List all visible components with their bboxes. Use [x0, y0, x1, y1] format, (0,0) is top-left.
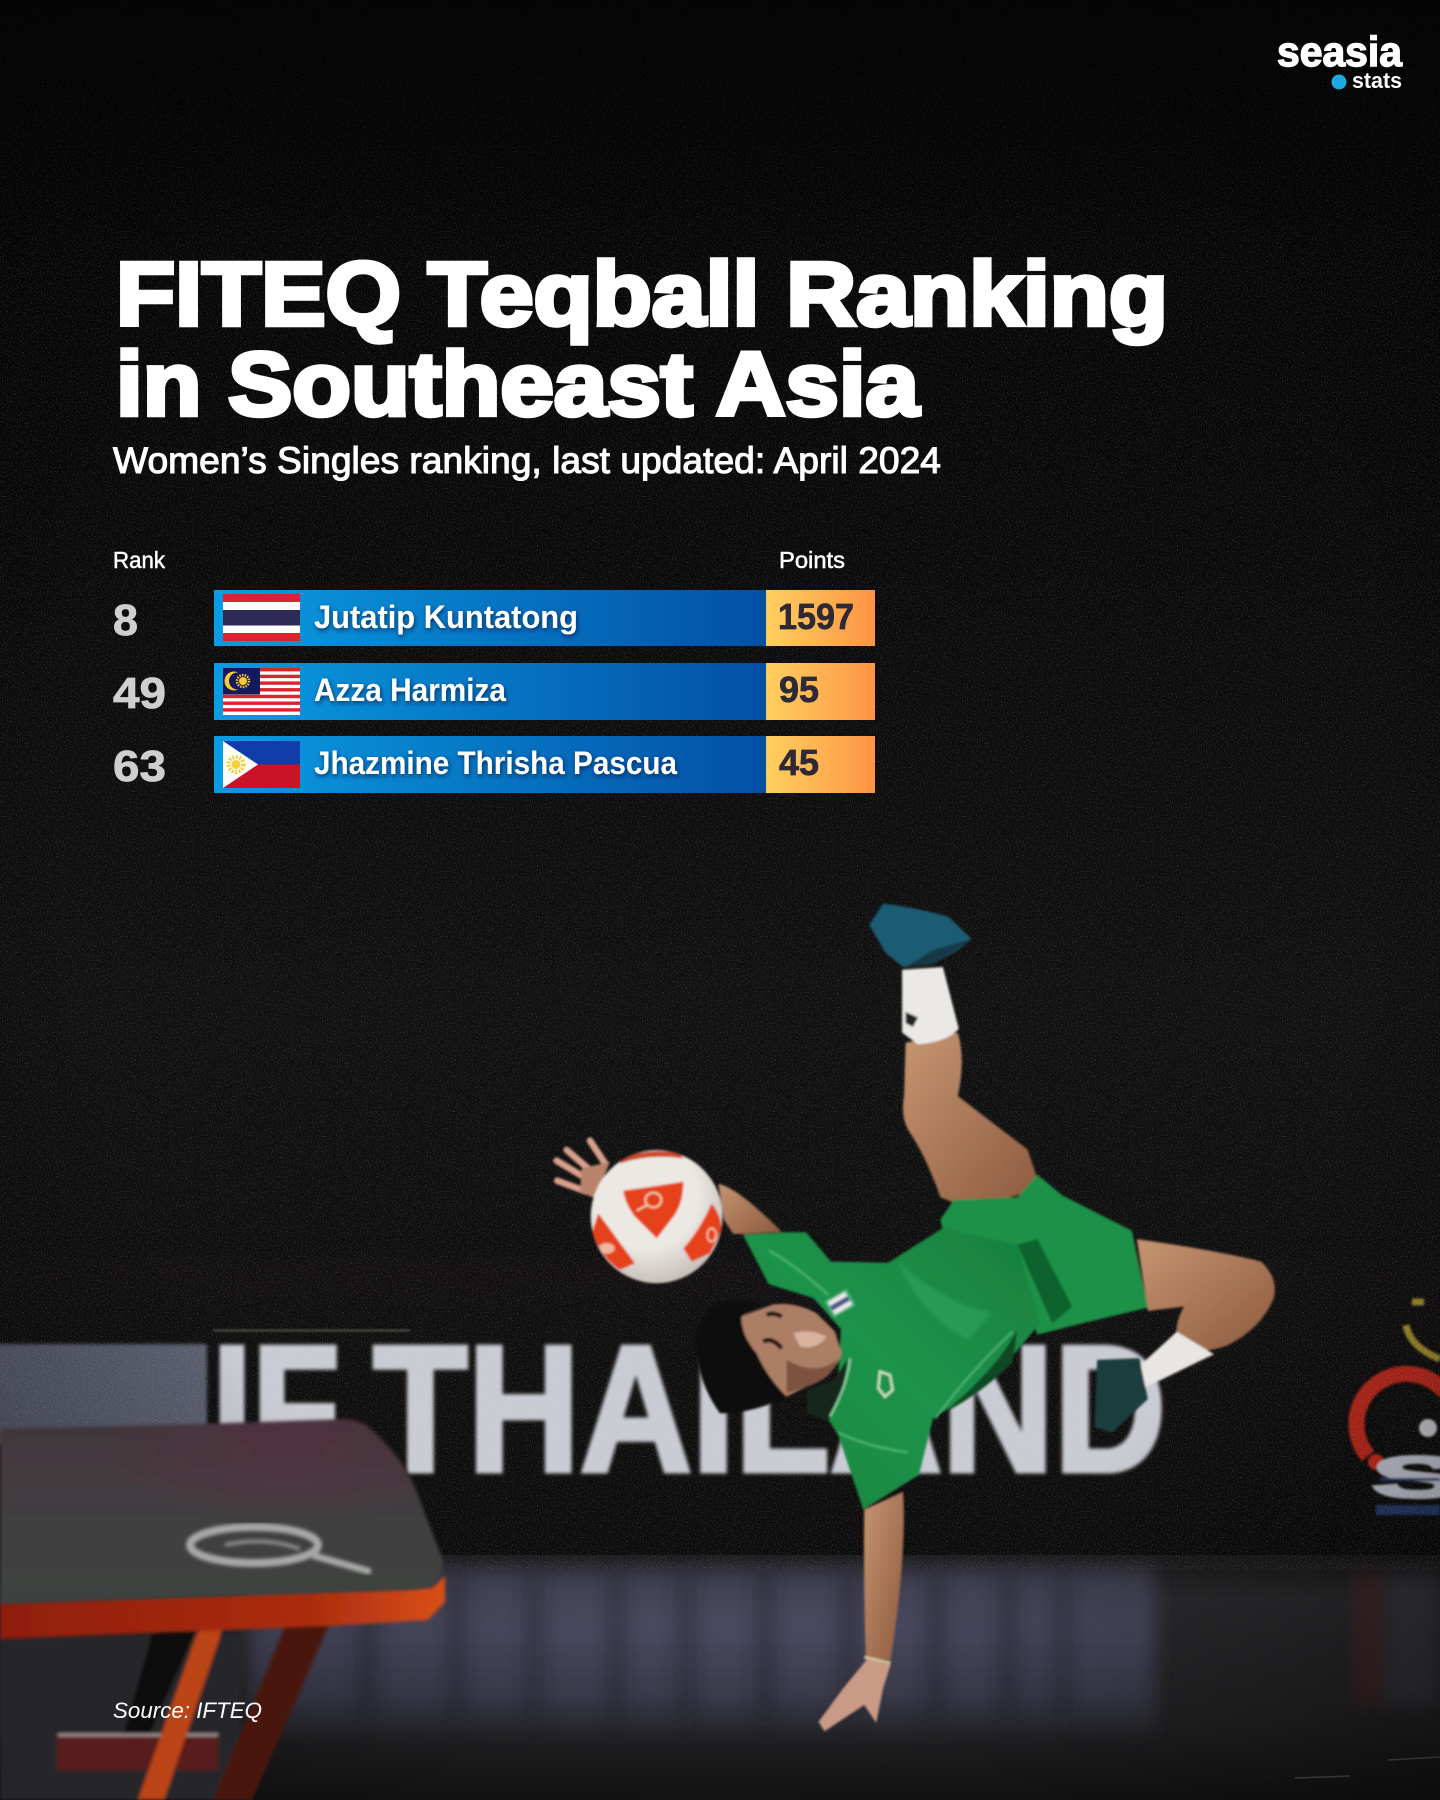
logo: stats — [1352, 68, 1402, 93]
row: Azza Harmiza: 95 — [779, 669, 819, 710]
shirt flag patch — [824, 1289, 856, 1318]
hanging arm — [864, 1492, 904, 1660]
raised lower leg — [903, 1033, 1040, 1204]
row: Jhazmine Thrisha Pascua: 63 — [113, 742, 166, 791]
hair — [696, 1301, 787, 1413]
row: Jutatip Kuntatong: 1597 — [778, 596, 854, 637]
left hand — [557, 1141, 605, 1192]
table edge — [0, 1576, 445, 1639]
row: Jhazmine Thrisha Pascua — [113, 736, 875, 793]
logo dot — [1332, 74, 1346, 90]
sock logo — [906, 1012, 918, 1027]
palm — [580, 1162, 610, 1198]
row: Jutatip Kuntatong — [113, 590, 875, 646]
row: Jhazmine Thrisha Pascua: 45 — [779, 742, 819, 783]
logo: seasia — [1277, 28, 1403, 75]
flag: Thailand — [223, 594, 300, 641]
title — [116, 245, 1168, 435]
subtitle: Women’s Singles ranking, last updated: April 2024 — [113, 440, 941, 481]
eyes — [763, 1314, 782, 1348]
flag: Philippines — [223, 741, 300, 788]
column header rank: Rank — [113, 547, 165, 573]
back sock — [1139, 1332, 1214, 1390]
back shoe — [1095, 1358, 1148, 1433]
banner frame line — [213, 1329, 410, 1332]
ranking table — [113, 547, 875, 793]
table legs — [0, 1622, 330, 1800]
banner text: THAILAND — [373, 1309, 1166, 1510]
row: Azza Harmiza: 49 — [113, 669, 166, 718]
row: Azza Harmiza — [113, 663, 875, 720]
bracelet — [864, 1657, 891, 1663]
right sponsor logo: S — [1372, 1445, 1440, 1510]
hanging hand — [818, 1659, 891, 1731]
raised shoe — [869, 904, 972, 967]
row: Jutatip Kuntatong: Jutatip Kuntatong — [314, 599, 578, 635]
back wall — [0, 1230, 1440, 1565]
banner text: IF — [212, 1309, 340, 1510]
back leg — [1137, 1239, 1275, 1350]
floor sheen lines — [1295, 1757, 1440, 1778]
ball — [591, 1150, 723, 1283]
shorts — [940, 1175, 1148, 1335]
row: Jhazmine Thrisha Pascua: Jhazmine Thrisha Pascua — [314, 745, 677, 781]
table logo — [190, 1527, 368, 1571]
neck — [807, 1358, 848, 1422]
shirt — [743, 1228, 1040, 1510]
raised sock — [902, 967, 959, 1044]
row: Azza Harmiza: Azza Harmiza — [314, 672, 506, 708]
column header points: Points — [779, 547, 845, 573]
title: in Southeast Asia — [116, 335, 920, 435]
forearm — [718, 1184, 782, 1234]
arena floor — [0, 1555, 1440, 1800]
face — [740, 1304, 842, 1397]
shirt emblem — [878, 1372, 893, 1397]
source: Source: IFTEQ — [113, 1698, 262, 1723]
player — [557, 904, 1275, 1731]
row: Jutatip Kuntatong: 8 — [113, 596, 138, 645]
teqball table — [0, 1419, 445, 1800]
table top — [0, 1419, 443, 1604]
collar — [830, 1358, 850, 1417]
right sponsor logo — [1356, 1302, 1440, 1515]
banner left panel — [0, 1344, 207, 1444]
title: FITEQ Teqball Ranking — [116, 245, 1168, 345]
flag: Malaysia — [223, 668, 300, 715]
